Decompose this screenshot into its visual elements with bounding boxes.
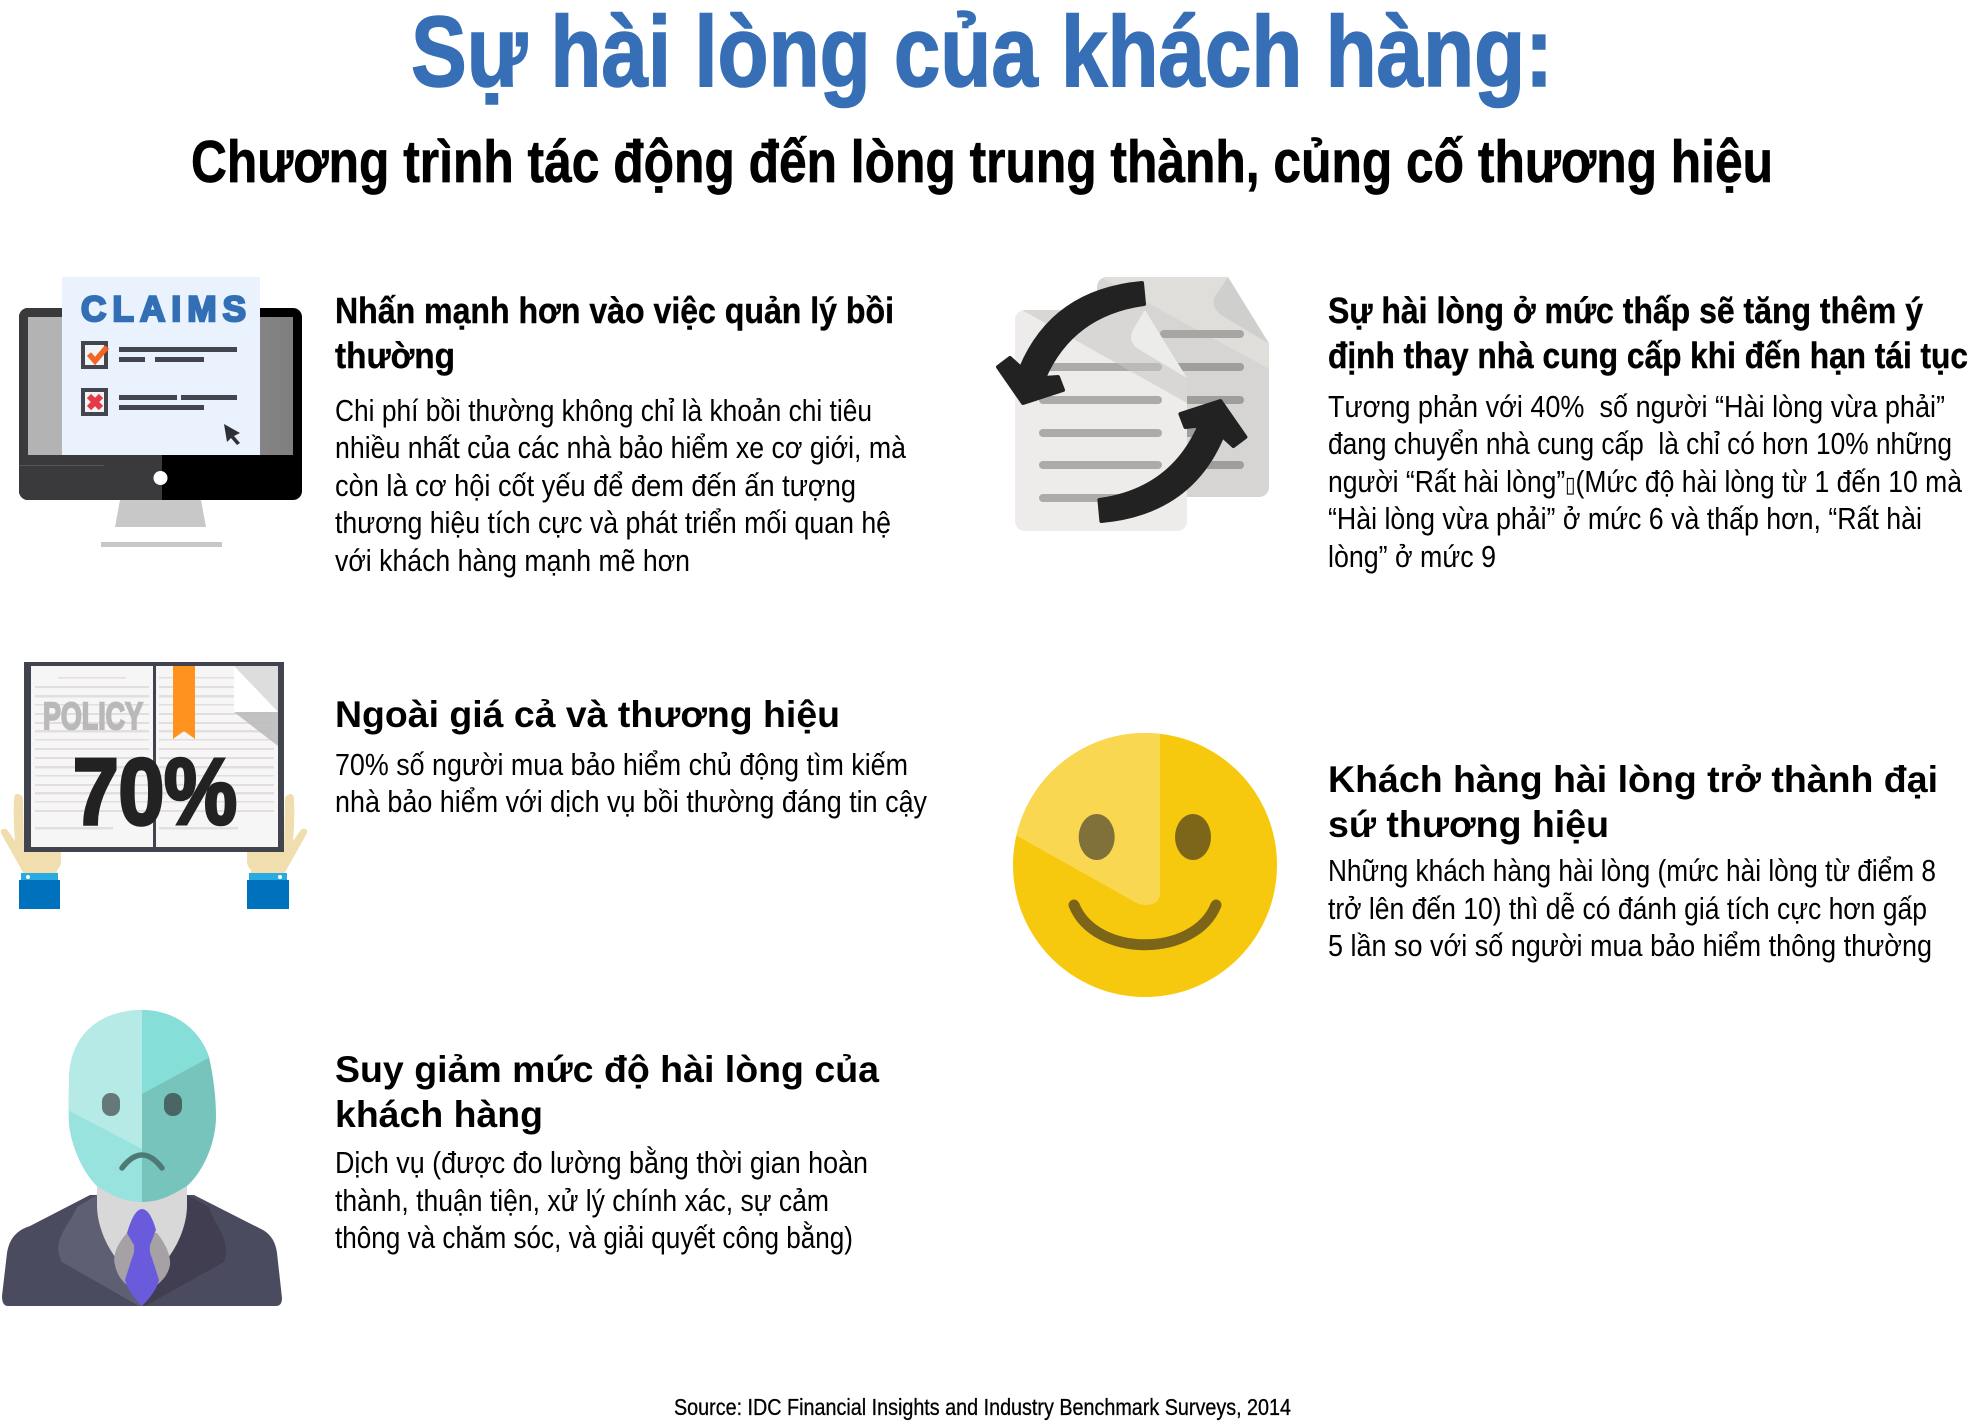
heading: declining satisfaction: [335, 1049, 879, 1135]
text: declining satisfaction: [335, 1145, 868, 1255]
panel: brand ambassadors: [1010, 720, 1938, 997]
panel: switching intent: [998, 277, 1968, 574]
text: beyond price: 70% số người mua bảo hiểm chủ động tìm kiếm: [335, 747, 908, 782]
panel: beyond price and brand: [1, 662, 927, 909]
heading: declining satisfaction: Suy giảm mức độ hài lòng của: [335, 1049, 879, 1090]
heading: brand ambassadors: Khách hàng hài lòng trở thành đại: [1328, 759, 1938, 800]
text: claims: [335, 393, 907, 578]
text: switching intent: lòng” ở mức 9: [1328, 539, 1496, 574]
source note: Source: IDC Financial Insights and Industry Benchmark Surveys, 2014: [674, 1394, 1291, 1420]
text: declining satisfaction: thành, thuận tiện, xử lý chính xác, sự cảm: [335, 1183, 829, 1218]
heading: claims: thường: [335, 335, 455, 376]
heading: brand ambassadors: sứ thương hiệu: [1328, 804, 1609, 845]
heading: claims: Nhấn mạnh hơn vào việc quản lý bồi: [335, 290, 894, 331]
icon: smiling face: [1010, 720, 1277, 997]
text: claims: thương hiệu tích cực và phát triển mối quan hệ: [335, 505, 891, 540]
icon: unhappy customer: [2, 1000, 282, 1306]
heading: declining satisfaction: khách hàng: [335, 1094, 543, 1135]
heading: switching intent: [1328, 290, 1968, 376]
icon: claims monitor: CLAIMS: [81, 290, 246, 329]
text: claims: Chi phí bồi thường không chỉ là khoản chi tiêu: [335, 393, 872, 428]
icon: policy book held in hands: 70%: [73, 739, 237, 844]
text: beyond price: [335, 747, 927, 819]
icon: documents with refresh arrows: [998, 277, 1275, 531]
panel: claims management: [19, 277, 907, 578]
text: switching intent: [1328, 389, 1963, 574]
heading: claims: [335, 290, 894, 376]
text: declining satisfaction: Dịch vụ (được đo lường bằng thời gian hoàn: [335, 1145, 868, 1180]
heading: brand ambassadors: [1328, 759, 1938, 845]
panel: declining satisfaction: [2, 1000, 879, 1306]
heading: beyond price: Ngoài giá cả và thương hiệu: [335, 694, 840, 735]
text: claims: nhiều nhất của các nhà bảo hiểm xe cơ giới, mà: [335, 430, 907, 465]
text: brand ambassadors: [1328, 853, 1936, 963]
icon: policy book held in hands: [1, 662, 307, 909]
text: claims: với khách hàng mạnh mẽ hơn: [335, 543, 690, 578]
text: claims: còn là cơ hội cốt yếu để đem đến ấn tượng: [335, 468, 856, 503]
text: declining satisfaction: thông và chăm sóc, và giải quyết công bằng): [335, 1220, 853, 1255]
icon: policy book held in hands: POLICY: [43, 696, 143, 738]
text: beyond price: nhà bảo hiểm với dịch vụ bồi thường đáng tin cậy: [335, 784, 927, 819]
icon: claims monitor: [19, 277, 302, 547]
